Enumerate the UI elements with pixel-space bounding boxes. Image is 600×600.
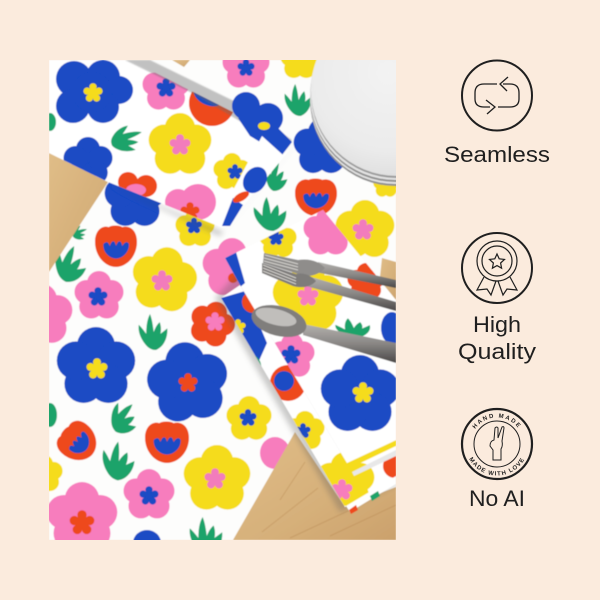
icon: hand made badge: MADE WITH LOVE [469, 456, 524, 476]
label: High Quality: High [473, 312, 521, 337]
leaf: green [139, 314, 167, 350]
label: High Quality [458, 312, 536, 364]
leaf: green [54, 246, 86, 283]
table runner base [49, 60, 396, 540]
flower: yellow top [280, 60, 318, 79]
flower: yellow fragment [152, 57, 188, 75]
wood table: top corners [49, 60, 190, 68]
flower: blue on fold [232, 92, 292, 155]
wood table: left [49, 153, 108, 272]
flower: blue with yellow centre [321, 355, 399, 431]
leaf: green [228, 350, 264, 380]
wood table: bottom [233, 432, 396, 540]
fold shadow strip [125, 60, 292, 148]
flower: yellow behind plates [372, 182, 396, 198]
flower: blue corner [225, 252, 245, 288]
plates stack [310, 4, 483, 186]
flower: blue right [381, 312, 403, 344]
flower: yellow with pink centre right [336, 200, 394, 257]
flower: blue [64, 137, 112, 184]
flower: pink with blue centre [142, 64, 190, 110]
flower: yellow with blue centre [175, 208, 215, 246]
flower: pink with red centre [165, 184, 216, 221]
fold strip [216, 136, 293, 228]
flower: yellow with blue centre [226, 396, 272, 440]
flower: yellow with pink centre [316, 452, 374, 509]
napkin shadow [108, 142, 296, 236]
flower: red [118, 172, 157, 197]
icon: hand made badge: HAND MADE [472, 413, 521, 429]
panel: product photo [49, 60, 396, 540]
runner flowers [49, 60, 396, 540]
flower: blue with yellow centre [57, 327, 135, 403]
flower: pink with red centre [49, 482, 118, 540]
flower: yellow left edge [49, 456, 64, 492]
tulip: red [56, 420, 97, 461]
leaf: left edge [44, 113, 56, 131]
fork lower [262, 263, 396, 311]
panel: lower napkin layers [221, 207, 407, 514]
flower: fold pieces [222, 162, 272, 226]
flower: yellow with pink centre [184, 445, 250, 510]
flower: blue lower under napkin [104, 182, 162, 227]
flower: red and blue [189, 80, 235, 126]
leaf: bottom [189, 516, 223, 540]
flower: blue strip [221, 291, 267, 363]
icon: hand made badge [460, 408, 534, 480]
flower: yellow with blue centre [213, 153, 251, 189]
spoon [248, 300, 396, 363]
flower: pink with blue centre [124, 469, 174, 518]
flower: blue under plates [292, 121, 343, 174]
stripes at stack edge [346, 440, 396, 514]
flower: yellow with blue centre [259, 221, 297, 257]
flower: large blue top left [56, 60, 133, 123]
leaf: left edge [49, 402, 58, 428]
fork upper [263, 253, 396, 288]
flower: pink with blue centre [269, 333, 315, 377]
flower: yellow with blue centre [285, 411, 325, 449]
leaf: green [110, 402, 136, 434]
tulip: red partial [270, 365, 306, 401]
flower: pink fragment [188, 60, 220, 84]
flower: yellow with pink centre [273, 262, 343, 330]
leaf: green [102, 441, 135, 481]
flower: red with pink centre [190, 301, 236, 348]
top napkin [225, 210, 396, 463]
flower: pink behind stack [202, 238, 246, 296]
flower: red [347, 263, 385, 299]
flower: yellow with pink centre [149, 113, 211, 174]
napkin stack shadow [215, 270, 396, 512]
label: Seamless: Seamless [444, 142, 550, 167]
leaf: green under plates [285, 84, 311, 116]
leaf: green [334, 317, 372, 339]
leaf: green [266, 162, 288, 192]
label: High Quality: Quality [458, 339, 536, 364]
flower: red right [383, 454, 407, 478]
leaf: green [254, 197, 286, 231]
flower: yellow with pink centre [132, 246, 198, 312]
flower: blue with red centre [146, 342, 228, 422]
tulip: red [145, 422, 189, 463]
cutlery [248, 253, 396, 363]
leaf: small [72, 225, 88, 240]
panel: upper folded napkin [44, 57, 293, 228]
flower: pink top with blue centre [222, 60, 270, 88]
bottom layer edges [343, 473, 396, 507]
leaf: green [105, 123, 149, 155]
label: No AI: No AI [469, 486, 525, 511]
tulip: red [95, 226, 137, 267]
icon: high quality rosette [462, 233, 532, 303]
flower: blue bottom [132, 529, 162, 540]
wood table: right [378, 258, 396, 305]
flower: pink left edge [49, 285, 73, 344]
flower: pink [304, 207, 352, 254]
icon: seamless loop [462, 60, 532, 130]
flower: pink partial [260, 437, 290, 469]
tulip: red [295, 178, 337, 216]
flower: pink with blue centre [74, 271, 124, 318]
